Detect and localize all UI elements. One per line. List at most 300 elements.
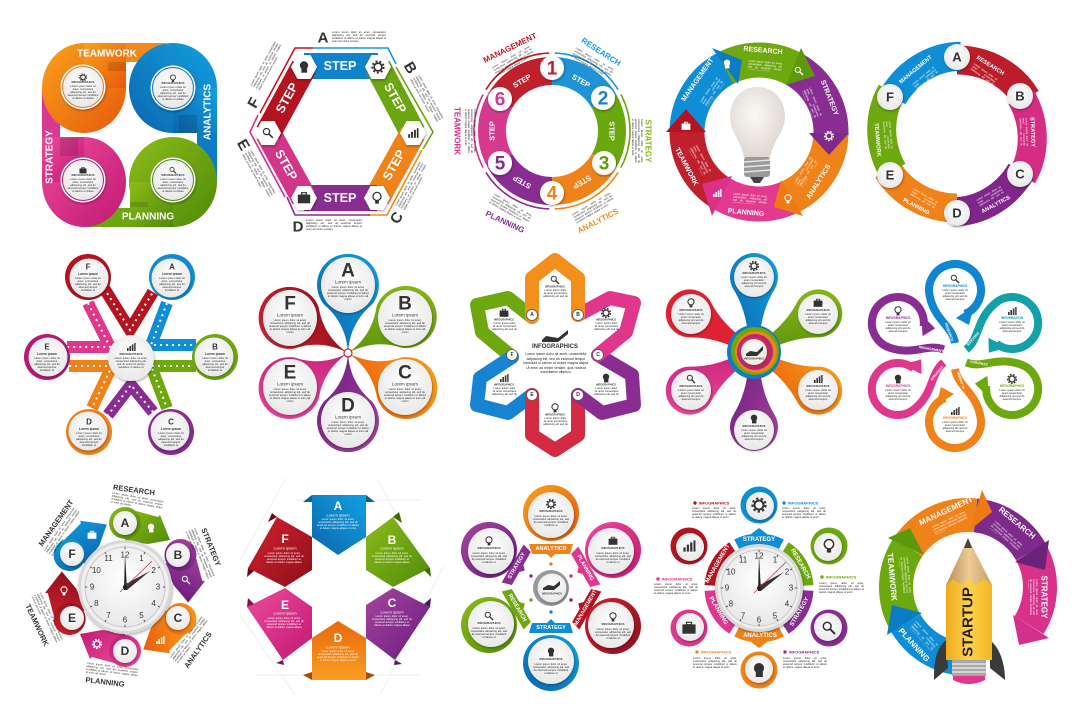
callout: top left bbox=[692, 500, 736, 523]
node B: Lorem ipsum bbox=[205, 352, 225, 356]
clock: 6 bbox=[757, 616, 762, 624]
petal F: Lorem ipsum dolor sit amet, consectetur adipiscing elit, sed do eiusmod tempor incididunt ut labore et dolore magna aliqua ut enim ad minim bbox=[269, 319, 311, 334]
step labels: STEP bbox=[608, 121, 616, 141]
center heading: INFOGRAPHICS bbox=[532, 344, 578, 350]
clock: 1 bbox=[139, 554, 144, 563]
center gray hub: INFOGRAPHICS bbox=[542, 592, 562, 596]
petal E bbox=[263, 359, 317, 415]
arm texts: INFOGRAPHICS bbox=[494, 382, 514, 386]
circle: blue info: INFOGRAPHICS bbox=[161, 81, 185, 85]
callout: middle right bbox=[819, 574, 864, 598]
ring labels: TEAMWORK bbox=[673, 147, 699, 187]
top teamwork band bbox=[84, 43, 166, 62]
callout: top right bbox=[782, 500, 826, 523]
petal C: Lorem ipsum bbox=[392, 382, 418, 386]
letter joints: C bbox=[596, 352, 600, 358]
panel: lettered ring bbox=[853, 29, 1061, 239]
petal E: Lorem ipsum dolor sit amet, consectetur adipiscing elit, sed do eiusmod tempor incididunt ut labore et dolore magna aliqua ut enim ad minim bbox=[269, 388, 311, 403]
label: planning: PLANNING bbox=[122, 212, 174, 222]
letter nodes bbox=[877, 44, 1033, 226]
circle: blue info: Lorem ipsum dolor sit amet, consectetur adipiscing elit, sed do eiusmod tempor incididunt ut labore et dolore bbox=[158, 86, 188, 101]
petal A: A bbox=[341, 260, 355, 282]
ribbon D: Lorem ipsum dolor sit amet, consectetur adipiscing elit, sed do eiusmod tempor incididunt ut labore et dolore magna aliqua ut enim bbox=[317, 650, 359, 662]
outer text blocks: Lorem ipsum dolor sit amet, consectetur adipiscing elit, sed do eiusmod tempor incididunt ut labore et dolore magna aliqua ut enim bbox=[631, 119, 643, 163]
swirl node: green bbox=[997, 375, 1027, 402]
step labels: STEP bbox=[570, 72, 592, 90]
clock: 5 bbox=[139, 611, 144, 620]
ribbon D: D bbox=[334, 631, 343, 645]
clock: 4 bbox=[151, 599, 156, 608]
panel: swirl arrows bbox=[862, 264, 1048, 448]
node F: F bbox=[86, 262, 91, 272]
petal B: Lorem ipsum dolor sit amet, consectetur adipiscing elit, sed do eiusmod tempor incididunt ut labore et dolore magna aliqua ut enim ad minim bbox=[384, 319, 426, 334]
callout: bottom left: Lorem ipsum dolor sit amet, consectetur adipiscing elit, sed do eiusmod tempor incididunt ut labore et dolore magna aliqua ut enim bbox=[693, 657, 737, 669]
banner labels: STRATEGY bbox=[743, 537, 775, 543]
outer text blocks: Lorem ipsum dolor sit amet, consectetur adipiscing elit, sed do eiusmod tempor incididunt ut labore et dolore magna aliqua ut enim bbox=[464, 109, 476, 153]
letter joints bbox=[506, 310, 604, 400]
circle: purple: INFOGRAPHICS bbox=[477, 546, 501, 550]
swirl arrows: STRATEGY bbox=[930, 364, 945, 381]
text block: B: Lorem ipsum dolor sit amet, consectetur adipiscing elit, sed do eiusmod tempor incididunt ut labore et dolore magna aliqua ut enim ad minim veniam bbox=[409, 74, 444, 122]
callout: top right: Lorem ipsum dolor sit amet, consectetur adipiscing elit, sed do eiusmod tempor incididunt ut labore et dolore magna aliqua ut enim bbox=[782, 507, 826, 519]
banners bbox=[502, 544, 601, 633]
callout: bottom left: INFOGRAPHICS bbox=[701, 650, 732, 654]
outer letters: E bbox=[233, 136, 253, 154]
swirl node: purple bbox=[883, 307, 913, 334]
arm texts: Lorem ipsum dolor sit amet consectetur adipiscing elit sed do bbox=[594, 387, 619, 396]
step labels: STEP bbox=[488, 121, 496, 141]
ring icons bbox=[682, 60, 833, 203]
outer text blocks: Lorem ipsum dolor sit amet, consectetur adipiscing elit, sed do eiusmod tempor incididunt ut labore et dolore magna aliqua ut enim ad minim bbox=[85, 662, 139, 677]
banners: MANAGEMENT bbox=[573, 589, 599, 627]
petal D: Lorem ipsum bbox=[335, 414, 361, 420]
step labels: STEP bbox=[381, 80, 409, 116]
panel: dotted spokes bbox=[24, 254, 238, 455]
arm texts: Lorem ipsum dolor sit amet consectetur adipiscing elit sed do bbox=[594, 322, 619, 331]
center hub: INFOGRAPHICS bbox=[119, 352, 143, 356]
circle: orange info bbox=[60, 64, 106, 110]
swirl arrows: MANAGEMENT bbox=[919, 345, 945, 353]
petal C bbox=[378, 359, 432, 415]
left strategy band bbox=[42, 88, 60, 180]
callout: middle left: Lorem ipsum dolor sit amet, consectetur adipiscing elit, sed do eiusmod tempor incididunt ut labore et dolore magna aliqua ut enim bbox=[654, 583, 698, 595]
panel: arrow ring with light bulb bbox=[661, 34, 857, 230]
outer labels: RESEARCH bbox=[113, 483, 155, 497]
arm texts: Lorem ipsum dolor sit amet consectetur adipiscing elit sed do bbox=[492, 322, 517, 331]
step labels: STEP bbox=[571, 173, 593, 191]
faint crease lines bbox=[240, 478, 444, 695]
swirl arrows: PROCESS bbox=[965, 331, 980, 347]
node: lower left: INFOGRAPHICS bbox=[679, 384, 703, 388]
ring text blocks bbox=[883, 63, 1028, 208]
banners: STRATEGY bbox=[536, 625, 566, 631]
ring labels: STRATEGY bbox=[1040, 576, 1048, 619]
node: top: Lorem ipsum dolor sit amet consectetur adipiscing elit sed do eiusmod tempor bbox=[741, 276, 767, 288]
letter joints: A bbox=[530, 312, 534, 318]
outer labels: STRATEGY bbox=[644, 120, 652, 163]
petal D bbox=[321, 392, 375, 448]
petal F: Lorem ipsum bbox=[277, 312, 303, 318]
callout: top right: INFOGRAPHICS bbox=[788, 500, 819, 506]
outer labels: PLANNING bbox=[484, 209, 526, 235]
callout: middle left: INFOGRAPHICS bbox=[662, 576, 693, 582]
node: upper right: Lorem ipsum dolor sit amet consectetur adipiscing elit sed do eiusmod tempor bbox=[805, 313, 831, 325]
ring labels: RESEARCH bbox=[743, 46, 783, 56]
stems and circles bbox=[657, 253, 851, 451]
step labels: STEP bbox=[511, 72, 533, 90]
outer labels: STRATEGY bbox=[199, 527, 223, 567]
clock: 9 bbox=[90, 582, 95, 592]
ring labels: MANAGEMENT bbox=[898, 54, 934, 85]
circle: orange top: INFOGRAPHICS bbox=[539, 509, 563, 513]
arm texts: INFOGRAPHICS bbox=[596, 382, 616, 386]
banners: ANALYTICS bbox=[536, 546, 567, 552]
node B bbox=[192, 334, 238, 380]
letter nodes: A bbox=[952, 50, 962, 64]
number nodes: 3 bbox=[599, 154, 609, 174]
node D bbox=[66, 409, 112, 455]
clock: 1 bbox=[773, 556, 778, 564]
callout: top left: Lorem ipsum dolor sit amet, consectetur adipiscing elit, sed do eiusmod tempor incididunt ut labore et dolore magna aliqua ut enim bbox=[692, 507, 736, 519]
text block: F: Lorem ipsum dolor sit amet, consectetur adipiscing elit, sed do eiusmod tempor incididunt ut labore et dolore magna aliqua ut enim ad minim veniam bbox=[250, 41, 282, 91]
node A: Lorem ipsum bbox=[162, 272, 182, 276]
swirl node: blue bbox=[940, 275, 970, 302]
panel: hexagon steps bbox=[233, 30, 444, 236]
ring arcs bbox=[661, 34, 857, 230]
ring labels: TEAMWORK bbox=[885, 553, 899, 602]
outer text blocks: Lorem ipsum dolor sit amet, consectetur adipiscing elit, sed do eiusmod tempor incididunt ut labore et dolore magna aliqua ut enim bbox=[488, 193, 533, 223]
outer thin frame bbox=[250, 48, 433, 215]
swirl node: green: INFOGRAPHICS bbox=[1000, 384, 1024, 388]
circle: red: INFOGRAPHICS bbox=[601, 622, 625, 626]
outer letters bbox=[233, 30, 420, 236]
node C bbox=[148, 409, 194, 455]
pencil rocket: STARTUP bbox=[960, 587, 976, 657]
ring labels bbox=[885, 495, 1048, 664]
panel: metaball hub bbox=[657, 253, 851, 451]
clock: 7 bbox=[106, 611, 111, 620]
ribbon C: Lorem ipsum dolor sit amet, consectetur adipiscing elit, sed do eiusmod tempor incididunt ut labore et dolore magna aliqua bbox=[372, 615, 412, 627]
node: lower left: Lorem ipsum dolor sit amet consectetur adipiscing elit sed do eiusmod tempor bbox=[678, 389, 704, 401]
orange teardrop bbox=[42, 43, 126, 133]
outer labels: RESEARCH bbox=[580, 36, 622, 68]
ribbon A: Lorem ipsum bbox=[326, 512, 350, 518]
banner labels bbox=[704, 537, 811, 639]
swirl node: blue: Lorem ipsum dolor sit amet consectetur adipiscing elit sed do eiusmod tempor bbox=[942, 289, 968, 301]
node: upper left: Lorem ipsum dolor sit amet consectetur adipiscing elit sed do eiusmod tempor bbox=[678, 313, 704, 325]
node: lower right bbox=[798, 370, 838, 410]
letter nodes bbox=[60, 511, 190, 663]
star arms bbox=[477, 260, 634, 450]
circle: orange info: Lorem ipsum dolor sit amet, consectetur adipiscing elit, sed do eiusmod tempor incididunt ut labore et dolore bbox=[68, 85, 98, 100]
teardrop petals bbox=[247, 254, 449, 452]
node E bbox=[24, 334, 70, 380]
circle: magenta bbox=[585, 522, 641, 578]
ribbon B: B bbox=[388, 533, 397, 547]
circle: blue bottom bbox=[523, 635, 579, 691]
clock: 2 bbox=[785, 568, 790, 576]
connector dots bbox=[529, 562, 573, 614]
node: lower left bbox=[671, 370, 711, 410]
center white hub: INFOGRAPHICS bbox=[744, 356, 764, 360]
ring labels: PLANNING bbox=[897, 626, 931, 664]
circle: magenta info bbox=[60, 158, 106, 202]
ring labels: STRATEGY bbox=[819, 79, 839, 117]
node: upper left: INFOGRAPHICS bbox=[679, 308, 703, 312]
swirl node: purple: Lorem ipsum dolor sit amet consectetur adipiscing elit sed do eiusmod tempor bbox=[885, 321, 911, 333]
petal C: Lorem ipsum dolor sit amet, consectetur adipiscing elit, sed do eiusmod tempor incididunt ut labore et dolore magna aliqua ut enim ad minim bbox=[384, 388, 426, 403]
outer text blocks: Lorem ipsum dolor sit amet, consectetur adipiscing elit, sed do eiusmod tempor incididunt ut labore et dolore magna aliqua ut enim bbox=[570, 47, 615, 77]
clock: 3 bbox=[789, 584, 794, 592]
ribbon C: C bbox=[388, 596, 397, 610]
white hexagon nodes with icons bbox=[255, 55, 426, 210]
outer text blocks: Lorem ipsum dolor sit amet, consectetur adipiscing elit, sed do eiusmod tempor incididunt ut labore et dolore magna aliqua ut enim ad minim bbox=[185, 528, 215, 579]
ribbon C bbox=[366, 588, 431, 665]
panel: ribbon hexagon bbox=[240, 478, 444, 695]
outer text blocks: Lorem ipsum dolor sit amet, consectetur adipiscing elit, sed do eiusmod tempor incididunt ut labore et dolore magna aliqua ut enim ad minim bbox=[31, 592, 63, 643]
panel: clock with icon circles bbox=[654, 486, 864, 688]
white dots bbox=[67, 288, 196, 415]
letter nodes: F bbox=[68, 547, 76, 561]
center heading bbox=[532, 330, 578, 350]
swirl node: magenta: INFOGRAPHICS bbox=[886, 384, 910, 388]
circle: magenta: Lorem ipsum dolor sit amet, consectetur adipiscing elit, sed do eiusmod tempor incididunt ut labore et bbox=[595, 552, 631, 564]
icon circles bbox=[670, 486, 848, 688]
node D: D bbox=[86, 418, 92, 426]
ribbon B: Lorem ipsum dolor sit amet, consectetur adipiscing elit, sed do eiusmod tempor incididunt ut labore et dolore magna aliqua bbox=[372, 552, 412, 564]
letter nodes: C bbox=[1015, 166, 1025, 182]
circle: red bbox=[585, 598, 641, 654]
node E: Lorem ipsum bbox=[37, 352, 57, 356]
swirl node: purple: INFOGRAPHICS bbox=[886, 316, 910, 320]
ring labels bbox=[673, 46, 839, 218]
arm texts: Lorem ipsum dolor sit amet consectetur adipiscing elit sed do bbox=[492, 387, 517, 396]
ribbon D bbox=[303, 621, 375, 680]
outer text blocks: Lorem ipsum dolor sit amet, consectetur adipiscing elit, sed do eiusmod tempor incididunt ut labore et dolore magna aliqua ut enim ad minim bbox=[110, 492, 164, 509]
petal B bbox=[378, 290, 432, 346]
node C: C bbox=[168, 418, 174, 426]
swirl node: teal bbox=[997, 307, 1027, 334]
ribbon E: Lorem ipsum bbox=[273, 610, 297, 616]
outer labels bbox=[23, 483, 223, 689]
letter nodes: D bbox=[952, 206, 962, 220]
ring text blocks bbox=[898, 511, 1038, 651]
node: lower right: INFOGRAPHICS bbox=[806, 384, 830, 388]
arm texts: Lorem ipsum dolor sit amet consectetur adipiscing elit sed do bbox=[543, 417, 568, 426]
panel: petal flower bbox=[247, 254, 449, 452]
ring labels: STRATEGY bbox=[1028, 117, 1036, 147]
node: bottom bbox=[734, 410, 774, 450]
ring segments bbox=[470, 49, 634, 213]
banners: PLANNING bbox=[575, 554, 595, 582]
arm texts bbox=[492, 276, 619, 429]
outer labels: TEAMWORK bbox=[452, 107, 462, 155]
outer letters: D bbox=[293, 218, 304, 236]
node E: E bbox=[44, 342, 50, 352]
node: lower right: Lorem ipsum dolor sit amet consectetur adipiscing elit sed do eiusmod tempor bbox=[805, 389, 831, 401]
outer text blocks bbox=[463, 45, 643, 227]
ribbon E bbox=[247, 588, 312, 665]
number nodes: 1 bbox=[547, 58, 558, 80]
arrow icons bbox=[61, 524, 190, 648]
ring labels: ANALYTICS bbox=[981, 195, 1012, 215]
arm texts: Lorem ipsum dolor sit amet consectetur adipiscing elit sed do bbox=[543, 289, 568, 298]
center dot bbox=[344, 349, 352, 357]
center text: Lorem ipsum dolor sit amet, consectetur adipiscing elit, sed do eiusmod tempor incididunt ut labore et dolore magna aliqua. Ut enim ad minim veniam, quis nostrud exercitation ullamco. bbox=[523, 352, 589, 374]
outer labels: PLANNING bbox=[85, 675, 125, 689]
petal D: D bbox=[341, 396, 355, 416]
ribbon F: Lorem ipsum bbox=[273, 546, 297, 550]
clock: 9 bbox=[725, 584, 730, 592]
banners: STRATEGY bbox=[507, 551, 527, 580]
step labels: STEP bbox=[380, 147, 408, 183]
swirl node: green: Lorem ipsum dolor sit amet consectetur adipiscing elit sed do eiusmod tempor bbox=[999, 389, 1025, 401]
swirl node: orange bbox=[940, 407, 970, 434]
arrow tabs bbox=[33, 507, 217, 667]
swirl node: orange: Lorem ipsum dolor sit amet consectetur adipiscing elit sed do eiusmod tempor bbox=[942, 421, 968, 433]
circle: green info: INFOGRAPHICS bbox=[161, 173, 185, 177]
circle: orange info: INFOGRAPHICS bbox=[71, 80, 95, 84]
magenta teardrop bbox=[42, 137, 126, 227]
callout: bottom left bbox=[693, 650, 737, 673]
banners: RESEARCH bbox=[507, 593, 527, 623]
node A bbox=[149, 254, 195, 300]
arm texts: INFOGRAPHICS bbox=[545, 284, 565, 288]
step labels: STEP bbox=[273, 80, 301, 116]
ribbon F: F bbox=[281, 532, 289, 546]
circle: green: Lorem ipsum dolor sit amet, consectetur adipiscing elit, sed do eiusmod tempor incididunt ut labore et bbox=[471, 627, 507, 639]
letter nodes: E bbox=[886, 168, 895, 182]
hexagon band segments bbox=[268, 66, 413, 198]
outer text blocks: Lorem ipsum dolor sit amet, consectetur adipiscing elit, sed do eiusmod tempor incididunt ut labore et dolore magna aliqua ut enim ad minim bbox=[43, 507, 80, 557]
swirl node: teal: INFORMATION bbox=[1001, 316, 1024, 320]
node: upper right: INFOGRAPHICS bbox=[806, 308, 830, 312]
ribbon A bbox=[303, 495, 375, 555]
circle: orange top bbox=[523, 485, 579, 541]
clock bbox=[78, 540, 172, 634]
ring labels: MANAGEMENT bbox=[681, 57, 716, 103]
outer letters: A bbox=[318, 30, 329, 46]
ribbon F bbox=[247, 513, 312, 587]
number nodes: 6 bbox=[495, 90, 505, 110]
icon: light bulb bbox=[730, 87, 785, 183]
center hub: Lorem ipsum dolor sit amet, consectetur adipiscing elit, sed do eiusmod tempor incididunt ut labore et bbox=[115, 357, 147, 369]
letter joints: B bbox=[576, 312, 580, 318]
banner labels: RESEARCH bbox=[789, 548, 811, 580]
step labels: STEP bbox=[324, 59, 356, 73]
callout: bottom right bbox=[783, 650, 827, 673]
swirl node: blue: INFOGRAPHICS bbox=[943, 284, 967, 288]
clock: 3 bbox=[156, 582, 161, 592]
ring labels: PLANNING bbox=[902, 197, 930, 217]
petal B: B bbox=[398, 294, 412, 314]
ribbon A: Lorem ipsum dolor sit amet, consectetur adipiscing elit, sed do eiusmod tempor incididunt ut labore et dolore magna aliqua ut enim bbox=[317, 518, 359, 530]
swirl node: orange: INFOGRAPHICS bbox=[943, 416, 967, 420]
letter joints: D bbox=[576, 392, 580, 398]
text block: D: Lorem ipsum dolor sit amet, consectetur adipiscing elit, sed do eiusmod tempor incididunt ut labore et dolore magna aliqua ut enim ad minim veniam bbox=[306, 219, 362, 231]
callout: middle left bbox=[654, 576, 698, 599]
ring labels: TEAMWORK bbox=[873, 123, 881, 157]
step labels: STEP bbox=[511, 173, 533, 191]
banner labels: MANAGEMENT bbox=[704, 543, 732, 584]
ring labels: RESEARCH bbox=[975, 55, 1005, 77]
swirl arrows: RESEARCH bbox=[944, 322, 954, 342]
node D: Lorem ipsum bbox=[79, 427, 99, 431]
letter nodes: B bbox=[1015, 88, 1025, 104]
outer text blocks: Lorem ipsum dolor sit amet, consectetur adipiscing elit, sed do eiusmod tempor incididunt ut labore et dolore magna aliqua ut enim bbox=[571, 192, 614, 224]
clock: 6 bbox=[123, 616, 128, 624]
green teardrop bbox=[129, 137, 217, 227]
outer letters: F bbox=[244, 95, 264, 111]
ribbon D: Lorem ipsum bbox=[326, 644, 350, 650]
callout: top left: INFOGRAPHICS bbox=[699, 500, 730, 506]
clock: 5 bbox=[773, 612, 778, 620]
outer thin arcs bbox=[445, 24, 659, 238]
node: bottom: Lorem ipsum dolor sit amet consectetur adipiscing elit sed do eiusmod tempor bbox=[741, 429, 767, 441]
swirl arrows: STRATEGY bbox=[969, 359, 988, 366]
label: teamwork: TEAMWORK bbox=[77, 48, 138, 60]
clock: 10 bbox=[727, 568, 736, 576]
text block: A: Lorem ipsum dolor sit amet, consectetur adipiscing elit, sed do eiusmod tempor incididunt ut labore et dolore magna aliqua ut enim ad minim veniam bbox=[332, 31, 386, 43]
arrowheads bbox=[887, 490, 1049, 645]
circle: magenta info: INFOGRAPHICS bbox=[71, 173, 95, 177]
callout: middle right: INFOGRAPHICS bbox=[826, 574, 857, 580]
node: top bbox=[734, 257, 774, 297]
petal E: Lorem ipsum bbox=[277, 382, 303, 386]
petal F bbox=[263, 290, 317, 346]
right analytics band bbox=[197, 88, 217, 182]
number nodes: 2 bbox=[598, 88, 608, 110]
outer labels: MANAGEMENT bbox=[37, 498, 76, 548]
step labels: STEP bbox=[324, 191, 356, 205]
clock: 7 bbox=[741, 612, 746, 620]
petal D: Lorem ipsum dolor sit amet, consectetur adipiscing elit, sed do eiusmod tempor incididunt ut labore et dolore magna aliqua ut enim ad minim bbox=[327, 421, 369, 436]
ring segments bbox=[853, 29, 1061, 239]
arm texts: INFOGRAPHICS bbox=[494, 318, 514, 322]
step labels bbox=[488, 72, 616, 191]
swirl arrows bbox=[862, 264, 1048, 448]
ribbon A: A bbox=[334, 499, 343, 513]
label: analytics: ANALYTICS bbox=[202, 84, 214, 140]
ring labels bbox=[873, 54, 1036, 217]
circle: blue bottom: Lorem ipsum dolor sit amet, consectetur adipiscing elit, sed do eiusmod tempor incididunt ut labore et bbox=[533, 663, 569, 675]
outer letters: B bbox=[400, 59, 420, 77]
swirl arrows: PLANNING bbox=[956, 371, 966, 389]
fold shadows bbox=[60, 62, 197, 207]
number nodes: 5 bbox=[495, 154, 506, 174]
ribbon B bbox=[366, 512, 431, 587]
panel: clock with arrows bbox=[23, 483, 223, 689]
center rings bbox=[727, 325, 781, 379]
node C: Lorem ipsum bbox=[161, 427, 181, 431]
outer text blocks: Lorem ipsum dolor sit amet, consectetur adipiscing elit, sed do eiusmod tempor incididunt ut labore et dolore magna aliqua ut enim ad minim bbox=[169, 616, 208, 664]
ribbon C: Lorem ipsum bbox=[380, 610, 404, 614]
ring labels: ANALYTICS bbox=[806, 163, 833, 201]
banner labels: STRATEGY bbox=[789, 597, 811, 627]
clock: 4 bbox=[785, 600, 790, 608]
number nodes bbox=[488, 56, 616, 205]
circle: green info bbox=[150, 158, 196, 202]
clock: 10 bbox=[92, 566, 101, 575]
circle: blue bottom: INFOGRAPHICS bbox=[539, 657, 563, 661]
circle: red: Lorem ipsum dolor sit amet, consectetur adipiscing elit, sed do eiusmod tempor incididunt ut labore et bbox=[595, 628, 631, 640]
callout: bottom right: Lorem ipsum dolor sit amet, consectetur adipiscing elit, sed do eiusmod tempor incididunt ut labore et dolore magna aliqua ut enim bbox=[783, 657, 827, 669]
panel: startup pencil rocket bbox=[868, 487, 1068, 687]
panel: rounded square loop bbox=[42, 43, 217, 227]
petal F: F bbox=[284, 294, 296, 314]
step labels: STEP bbox=[272, 147, 300, 183]
ring labels: MANAGEMENT bbox=[918, 495, 974, 527]
